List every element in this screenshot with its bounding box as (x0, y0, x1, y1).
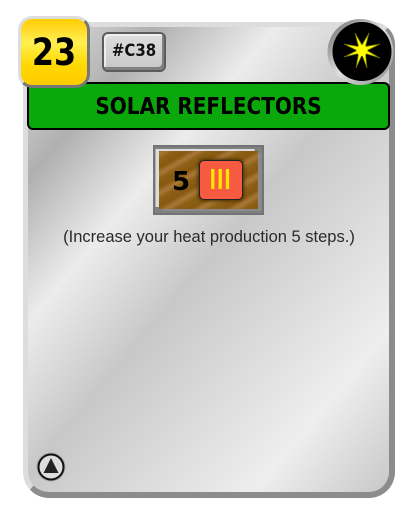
title banner (27, 82, 390, 130)
icon: requirement triangle (36, 452, 66, 482)
icon: heat resource (199, 160, 243, 200)
title text: SOLAR REFLECTORS (95, 94, 322, 120)
description text: (Increase your heat production 5 steps.) (63, 228, 355, 246)
production amount: 5 (172, 167, 190, 197)
heat bars (211, 169, 230, 189)
cost badge (18, 16, 90, 88)
icon: power tag with star (328, 19, 394, 85)
card number text: #C38 (112, 41, 156, 61)
cost value: 23 (32, 30, 76, 74)
card number tag (102, 32, 166, 72)
production background (159, 151, 258, 209)
production box (153, 145, 264, 215)
